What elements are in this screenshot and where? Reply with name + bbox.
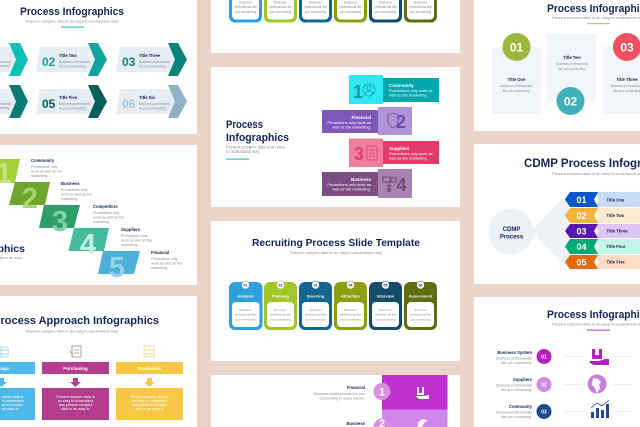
- item 3: like you connecting.: [501, 415, 532, 419]
- column: purchasing: way present complex: [59, 403, 93, 407]
- step 3: [116, 43, 187, 76]
- row: business: [322, 169, 412, 198]
- column: production: [116, 362, 183, 420]
- column 1: 01: [510, 40, 523, 54]
- panel: recruiting cards cropped top: professional like: [234, 5, 257, 9]
- row: financial: [322, 107, 412, 135]
- hub circle: [488, 208, 534, 254]
- panel: recruiting cards cropped top: you connecting: [305, 10, 326, 14]
- step 3 parallelogram: [39, 205, 80, 238]
- icon: design: [0, 347, 9, 357]
- row: community: well as the marketing.: [389, 92, 428, 98]
- step 1 text: work as well as the: [31, 170, 62, 174]
- row: suppliers: well as the marketing.: [389, 156, 428, 160]
- row 1: [565, 192, 640, 207]
- panel: recruiting cards cropped top: professional like: [339, 5, 362, 9]
- accent line: [587, 23, 610, 24]
- heading: Infographics: [226, 132, 289, 144]
- step 5: Title Five: [59, 95, 78, 100]
- card: assessment: Business: [414, 308, 427, 312]
- step 3 text: marketing.: [93, 220, 110, 224]
- panel: CDMP process: [474, 144, 640, 284]
- row 3: Title Three: [606, 228, 628, 234]
- column 2: [547, 34, 596, 115]
- column: purchasing: data in an easy to: [61, 407, 90, 411]
- step 2 parallelogram: 2: [22, 183, 38, 215]
- title: Recruiting Process Slide Template: [252, 237, 420, 249]
- panel: recruiting process: [211, 221, 460, 361]
- card: attraction: [334, 281, 367, 330]
- card: interview: [369, 281, 402, 330]
- column: design: sent complex: [2, 403, 23, 407]
- row 4: [565, 239, 640, 254]
- step 3: Business professional: [139, 60, 170, 64]
- circle 1: [374, 383, 390, 400]
- column 2: like you connecting.: [558, 67, 586, 71]
- row: financial: 2: [396, 112, 406, 132]
- step 5 text: [151, 250, 182, 270]
- item 2: like you connecting.: [501, 388, 532, 392]
- column 2: 02: [564, 94, 577, 108]
- row 1: Title One: [606, 198, 625, 202]
- description: Present complex data in an easy: [226, 144, 286, 150]
- step 3: Title Three: [139, 53, 161, 58]
- icon: production: [144, 346, 154, 357]
- step 3 text: work as well as the: [93, 216, 124, 220]
- card: sourcing: [299, 281, 332, 330]
- card: analysis: professional like: [235, 312, 257, 316]
- panel: recruiting cards cropped top: you connecting: [375, 10, 396, 14]
- step 2: like you connecting.: [59, 64, 87, 68]
- panel: icon list: [474, 297, 640, 427]
- step 2 text: work as well as the: [61, 192, 92, 196]
- step 1 parallelogram: [0, 158, 20, 190]
- column 3: like you connecting.: [613, 89, 640, 93]
- text: financial: Business professionals like you: [314, 392, 365, 396]
- column: production: an easy to understand: [132, 399, 167, 403]
- icon: hand with building: [416, 387, 429, 399]
- column: production: way present complex: [133, 403, 167, 407]
- card: planning: you connecting: [270, 318, 291, 322]
- step 3: like you connecting.: [139, 64, 167, 68]
- card: interview: Business: [379, 308, 392, 312]
- panel: recruiting cards cropped top: professional like: [409, 5, 432, 9]
- step 6: 06: [122, 97, 136, 111]
- step 5: like you connecting.: [59, 106, 87, 110]
- card: assessment: you connecting: [410, 318, 431, 322]
- step 2: 02: [42, 55, 56, 69]
- row: community: Promotions only work as: [389, 88, 433, 93]
- lilac block: [382, 410, 448, 427]
- icon: bar chart: [591, 400, 609, 418]
- row: financial: Promotions only work as: [327, 120, 371, 125]
- row: suppliers: 3: [354, 144, 364, 164]
- column: production: Present complex data in: [130, 395, 169, 399]
- panel: recruiting cards cropped top: Business: [379, 0, 392, 4]
- text: financial: [314, 385, 365, 400]
- item 2: Suppliers: [513, 377, 533, 382]
- step 2 text: [61, 181, 92, 201]
- card: attraction: 04: [349, 284, 352, 288]
- step 3 parallelogram: 3: [52, 206, 68, 238]
- step 3 text: Competitors: [93, 204, 118, 209]
- panel: recruiting cards cropped top: Business: [414, 0, 427, 4]
- row: business: Promotions only work as: [327, 182, 371, 187]
- step 5 text: Promotions only: [151, 257, 178, 261]
- step 2 text: Promotions only: [61, 188, 88, 192]
- step 6: [116, 85, 187, 118]
- panel: recruiting cards cropped top: Business: [239, 0, 252, 4]
- column 1: like you connecting.: [503, 89, 530, 93]
- card: assessment: professional like: [410, 312, 432, 316]
- row: suppliers: Suppliers: [389, 146, 410, 151]
- card: attraction: you connecting: [340, 318, 361, 322]
- description: [226, 144, 286, 154]
- accent line: [61, 26, 84, 28]
- item 2: 02: [541, 382, 547, 388]
- step 6: Title Six: [139, 95, 156, 100]
- panel: recruiting cards cropped top: [211, 0, 460, 53]
- card: analysis: Business: [239, 308, 252, 312]
- panel: recruiting cards cropped top: Business: [344, 0, 357, 4]
- item 3: 03: [541, 410, 547, 416]
- panel: process approach: [0, 296, 197, 427]
- column 3: Title Three: [616, 77, 638, 82]
- card: sourcing: you connecting: [305, 318, 326, 322]
- column 2: Title Two: [563, 55, 581, 60]
- item 1: [496, 349, 552, 365]
- item 3: Community: [509, 404, 533, 409]
- panel: financial and business list: [211, 375, 460, 427]
- panel: numbered columns: [474, 0, 640, 131]
- card: analysis: [229, 281, 262, 330]
- text: financial: connecting to share advice.: [320, 396, 365, 400]
- step 2: [36, 43, 107, 76]
- panel: staircase steps: [0, 145, 197, 285]
- step 1 text: Promotions only: [31, 165, 58, 169]
- card: planning: Planning: [272, 294, 290, 298]
- column 3: [603, 33, 640, 114]
- column: production: data in an easy to: [135, 407, 164, 411]
- card: attraction: Attraction: [341, 294, 360, 298]
- step 5 parallelogram: [98, 251, 140, 284]
- circle 2: [374, 418, 390, 427]
- item 1: Business System: [497, 350, 532, 355]
- panel: recruiting cards cropped top: professional like: [304, 5, 327, 9]
- step 1 text: Community: [31, 158, 55, 163]
- subtitle: Present complex data in an easy-to-understand way: [26, 328, 118, 334]
- item 1: Business professionals: [496, 356, 532, 360]
- column: production: Production: [138, 366, 162, 371]
- item 1: like you connecting.: [501, 361, 532, 365]
- card: sourcing: Business: [309, 308, 322, 312]
- panel: stacked process: [211, 67, 460, 207]
- step 4 parallelogram: [68, 228, 109, 261]
- panel: recruiting cards cropped top: Business: [274, 0, 287, 4]
- step 4 text: Promotions only: [121, 234, 148, 238]
- card: interview: you connecting: [375, 318, 396, 322]
- column 2: Business professionals: [556, 62, 588, 66]
- step 2: Business professional: [59, 60, 90, 64]
- column 1: Title One: [508, 77, 526, 82]
- row 4: 04: [576, 242, 587, 252]
- step 2 text: Business: [61, 181, 80, 186]
- panel: recruiting cards cropped top: you connecting: [270, 10, 291, 14]
- card: attraction: professional like: [340, 312, 362, 316]
- card: planning: professional like: [270, 312, 292, 316]
- step 4 parallelogram: 4: [80, 229, 96, 261]
- card: interview: Interview: [377, 294, 395, 298]
- step 3: 03: [122, 55, 136, 69]
- item 2: Business professionals: [496, 384, 532, 388]
- panel: recruiting cards cropped top: professional like: [374, 5, 397, 9]
- icon: purchasing: [70, 346, 81, 357]
- purple block: [382, 375, 448, 410]
- row: business: well as the marketing.: [332, 186, 371, 192]
- step 4: [0, 85, 28, 118]
- step 5 text: work as well as the: [151, 262, 182, 266]
- card: interview: professional like: [375, 312, 397, 316]
- title: Process Infographics: [20, 6, 124, 18]
- step 2: Title Two: [59, 53, 77, 58]
- icon: hand with building: [589, 349, 609, 365]
- row 5: [565, 255, 640, 269]
- text: financial: Financial: [347, 385, 365, 390]
- panel: recruiting cards cropped top: you connecting: [235, 10, 256, 14]
- panel: process arrows: [0, 0, 197, 134]
- card: planning: [264, 281, 297, 330]
- row 1: 01: [576, 195, 587, 205]
- row 3: 03: [576, 226, 587, 236]
- card: sourcing: professional like: [305, 312, 327, 316]
- panel: recruiting cards cropped top: Business: [309, 0, 322, 4]
- step 1: [0, 43, 28, 76]
- row 2: [565, 208, 640, 223]
- step 5 text: Financial: [151, 250, 169, 255]
- row: community: [349, 75, 439, 104]
- subtitle: Present complex data in an easy-to-understand way: [290, 250, 382, 255]
- card: sourcing: Sourcing: [307, 294, 325, 298]
- subtitle: Present complex data in an easy-to-understand way: [26, 18, 118, 24]
- card: interview: 05: [384, 284, 387, 288]
- step 5 text: marketing.: [151, 266, 168, 270]
- accent line: [226, 158, 249, 160]
- row 5: 05: [576, 258, 587, 268]
- funnel: [531, 193, 568, 269]
- step 6: Business professional: [139, 102, 170, 106]
- row: community: Community: [389, 83, 414, 88]
- column: purchasing: Present complex data in: [56, 395, 95, 399]
- item 1: 01: [541, 354, 547, 360]
- row: suppliers: Promotions only work as: [389, 151, 433, 156]
- column: purchasing: an easy to understand: [58, 399, 93, 403]
- row: business: Business: [351, 177, 371, 182]
- row 2: 02: [576, 211, 587, 221]
- row: community: 1: [353, 82, 363, 102]
- step 2 parallelogram: [9, 182, 50, 215]
- step 4 text: [121, 227, 152, 247]
- step 4 text: Suppliers: [121, 227, 141, 232]
- step 4 text: marketing.: [121, 243, 138, 247]
- heading: Process: [226, 119, 263, 131]
- step 5: Business professional: [59, 102, 90, 106]
- step 3 text: Promotions only: [93, 211, 120, 215]
- step 5: [36, 85, 107, 118]
- card: sourcing: 03: [314, 284, 317, 288]
- card: assessment: Assessment: [409, 294, 433, 298]
- connector lines: [563, 356, 632, 412]
- card: planning: Business: [274, 308, 287, 312]
- column: design: an easy to: [2, 407, 19, 411]
- icon: globe: [588, 374, 606, 394]
- step 1 text: [31, 158, 62, 178]
- card: analysis: Analysis: [237, 294, 255, 298]
- card: attraction: Business: [344, 308, 357, 312]
- item 2: [496, 377, 552, 392]
- text: business: Business: [346, 421, 366, 426]
- heading: [226, 119, 289, 144]
- card: analysis: 01: [244, 284, 247, 288]
- card: assessment: 06: [419, 284, 422, 288]
- column: purchasing: Purchasing: [63, 366, 88, 371]
- icon: globe: [418, 419, 428, 427]
- step 6: like you connecting.: [139, 106, 167, 110]
- row 2: Title Two: [606, 213, 625, 218]
- circle 1: 1: [379, 386, 385, 398]
- column 1: Business professionals: [500, 84, 533, 88]
- card: assessment: [404, 281, 437, 330]
- column 1: [492, 33, 541, 114]
- column: design: to understand: [2, 399, 24, 403]
- row 3: [565, 224, 640, 238]
- accent line: [587, 330, 610, 331]
- row: financial: Financial: [351, 115, 371, 120]
- step 3 text: [93, 204, 124, 224]
- card: analysis: you connecting: [235, 318, 256, 322]
- hub circle: Process: [500, 234, 524, 240]
- panel: recruiting cards cropped top: you connecting: [340, 10, 361, 14]
- panel: recruiting cards cropped top: professional like: [269, 5, 292, 9]
- column 3: 03: [620, 40, 634, 54]
- step 4 text: work as well as the: [121, 238, 152, 242]
- step 1 text: marketing.: [31, 174, 48, 178]
- row 5: Title Five: [606, 260, 625, 264]
- step 2 text: marketing.: [61, 197, 78, 201]
- column: purchasing: [42, 362, 109, 420]
- panel: recruiting cards cropped top: you connecting: [410, 10, 431, 14]
- column: design: mplex data in: [2, 395, 23, 399]
- card: planning: 02: [279, 284, 282, 288]
- row 4: Title Four: [606, 244, 626, 249]
- row: financial: well as the marketing.: [332, 124, 371, 130]
- item 3: Business professionals: [496, 410, 532, 414]
- hub circle: CDMP: [503, 227, 520, 233]
- item 3: [496, 404, 552, 419]
- column: design: [0, 362, 35, 420]
- row: business: 4: [396, 175, 407, 195]
- step 5 parallelogram: 5: [109, 252, 125, 284]
- row: suppliers: [349, 138, 439, 167]
- step 5: 05: [42, 97, 56, 111]
- description: to understand way: [226, 149, 260, 154]
